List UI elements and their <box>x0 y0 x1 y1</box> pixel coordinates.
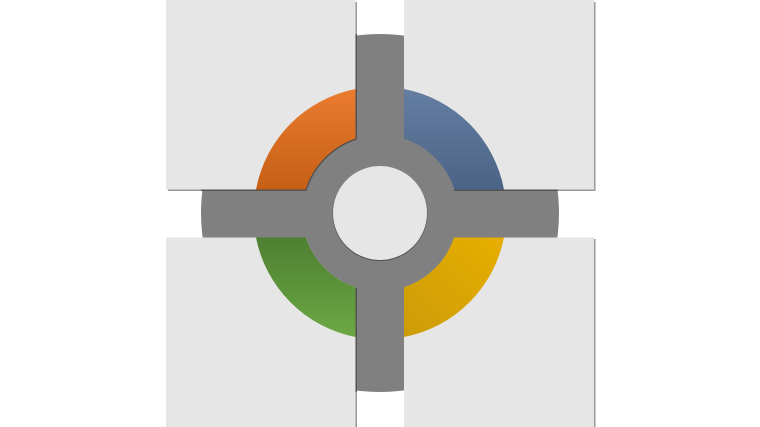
inner arc shadow: orange <box>306 139 356 190</box>
panel: top right <box>404 0 594 190</box>
center circle <box>333 166 427 260</box>
gray inner ring <box>302 135 458 291</box>
panel: bottom left <box>166 238 356 427</box>
segment: yellow <box>404 238 504 337</box>
panel: top left <box>166 0 356 190</box>
segment: orange <box>256 89 356 190</box>
segment: green <box>256 238 356 337</box>
gray cross arms <box>201 34 559 392</box>
panel shadows <box>168 2 596 427</box>
segment: blue <box>404 89 504 190</box>
panel edge shadows on gray <box>201 34 558 392</box>
panel: bottom right <box>404 238 594 427</box>
crosshair diagram <box>166 0 596 427</box>
center circle shadow <box>333 166 427 261</box>
